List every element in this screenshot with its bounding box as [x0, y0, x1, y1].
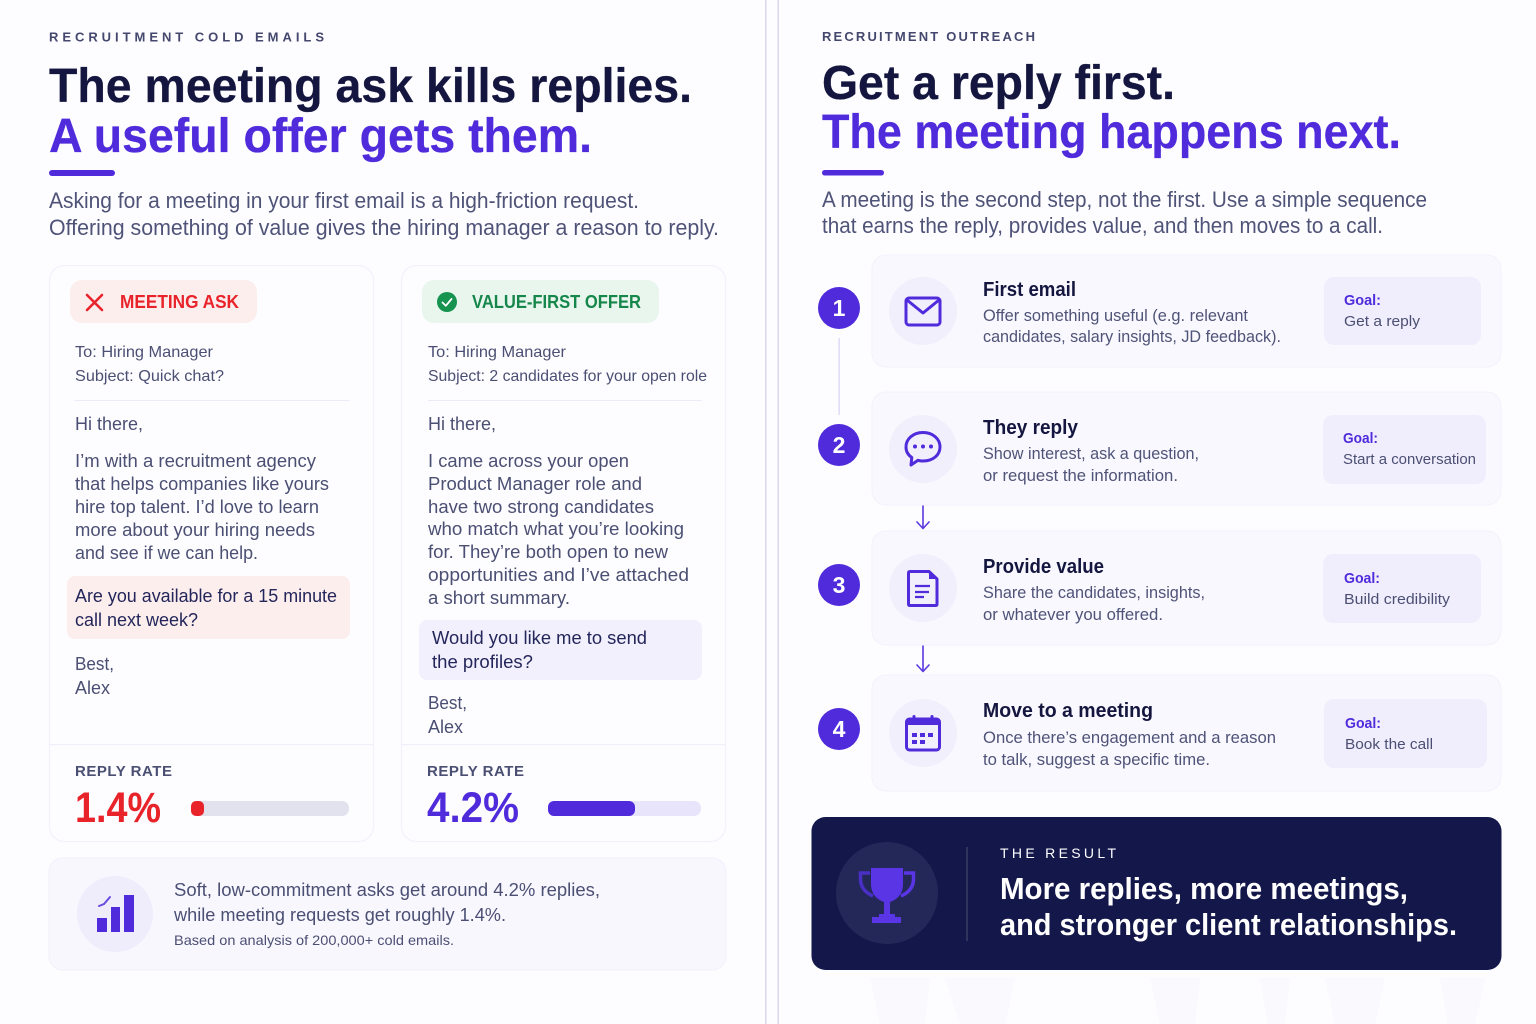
goal: book the call: Goal: — [1345, 715, 1381, 732]
text block: right intro: A meeting is the second step, not the first. Use a simple sequence — [822, 187, 1427, 212]
arrow: step 2 to step 3 — [917, 506, 929, 528]
text block: email header — [75, 344, 224, 385]
badge: value-first offer: VALUE-FIRST OFFER — [472, 292, 641, 312]
text block: sign-off: Best, — [75, 653, 114, 674]
chart: reply rate 1.4% — [75, 763, 349, 832]
number badge 1 — [818, 287, 860, 329]
text block: right intro: that earns the reply, provides value, and then moves to a call. — [822, 213, 1383, 238]
text block: email body: a short summary. — [428, 587, 570, 608]
title: right headline: The meeting happens next. — [822, 106, 1401, 159]
text block: email header — [428, 344, 707, 385]
step 4: move to a meeting — [818, 675, 1501, 791]
title: right headline: Get a reply first. — [822, 57, 1175, 110]
chart: reply rate 1.4%: REPLY RATE — [75, 763, 172, 780]
text: provide value copy: Share the candidates, insights, — [983, 584, 1205, 602]
text block: email header: Subject: 2 candidates for your open role — [428, 368, 707, 385]
text block: email body: I’m with a recruitment agency — [75, 450, 317, 471]
text block: email body: for. They’re both open to new — [428, 541, 669, 562]
text: first email copy: candidates, salary insights, JD feedback). — [983, 328, 1281, 346]
icon: document — [889, 554, 957, 622]
text block: sign-off — [75, 653, 114, 698]
title: left headline: A useful offer gets them. — [49, 110, 592, 163]
goal: build credibility — [1323, 554, 1481, 623]
icon: green check — [437, 292, 457, 312]
eyebrow: recruitment cold emails: RECRUITMENT COLD EMAILS — [49, 30, 324, 44]
chart: reply rate 4.2%: 4.2% — [427, 784, 519, 832]
icon: calendar — [889, 699, 957, 767]
text block: email body: Hi there, — [75, 413, 143, 434]
text: they reply copy: Show interest, ask a question, — [983, 445, 1199, 463]
icon: trophy — [836, 842, 938, 944]
step 3: provide value — [818, 531, 1501, 645]
callout: soft ask highlight: the profiles? — [432, 651, 533, 672]
panel: right column recruitment outreach — [812, 29, 1502, 970]
step 2: they reply — [818, 392, 1501, 505]
text: move to a meeting copy: to talk, suggest a specific time. — [983, 751, 1210, 769]
text: move to a meeting copy: Move to a meeting — [983, 700, 1153, 722]
goal: start a conversation: Goal: — [1343, 430, 1378, 447]
text block: sign-off: Alex — [75, 677, 111, 698]
number badge 2: 2 — [833, 432, 845, 458]
goal: build credibility: Build credibility — [1344, 591, 1451, 608]
text block: email body: I came across your open — [428, 450, 629, 471]
text: they reply copy: or request the information. — [983, 467, 1178, 485]
text block: email body — [427, 413, 689, 608]
badge: meeting ask: MEETING ASK — [120, 292, 239, 312]
text block: sign-off — [428, 692, 467, 737]
callout: meeting request highlight: call next week? — [75, 609, 198, 630]
text: the result copy: and stronger client relationships. — [1000, 907, 1457, 942]
icon: speech bubble — [889, 415, 957, 483]
panel: statistic note — [49, 858, 726, 970]
text: first email copy — [983, 279, 1281, 346]
text block: email body: Hi there, — [428, 413, 496, 434]
goal: book the call: Book the call — [1345, 736, 1433, 753]
callout: meeting request highlight — [67, 576, 350, 639]
chart: reply rate 4.2%: REPLY RATE — [427, 763, 524, 780]
title: right headline — [822, 57, 1401, 159]
number badge 1: 1 — [833, 295, 846, 321]
panel: left column recruitment cold emails — [49, 30, 726, 970]
text block: email body: hire top talent. I’d love to learn — [75, 496, 319, 517]
text block: email header: Subject: Quick chat? — [75, 368, 224, 385]
text block: statistic explanation — [173, 879, 600, 948]
goal: get a reply: Get a reply — [1344, 313, 1421, 330]
goal: start a conversation — [1323, 415, 1486, 484]
text block: email header: To: Hiring Manager — [428, 344, 567, 361]
goal: get a reply: Goal: — [1344, 292, 1381, 309]
text block: email body: that helps companies like yours — [75, 473, 329, 494]
text block: left intro: Offering something of value gives the hiring manager a reason to reply. — [49, 215, 719, 240]
panel: value-first offer email — [402, 266, 726, 842]
text: provide value copy: Provide value — [983, 556, 1104, 578]
icon: red cross — [87, 295, 102, 310]
text: the result copy — [1000, 845, 1457, 942]
chart: reply rate 1.4%: 1.4% — [75, 784, 161, 832]
number badge 3 — [818, 564, 860, 606]
step 1: first email — [818, 255, 1501, 367]
panel: the result — [812, 817, 1502, 970]
number badge 2 — [818, 424, 860, 466]
goal: get a reply — [1324, 277, 1481, 345]
text block: email body: and see if we can help. — [75, 542, 258, 563]
text: move to a meeting copy: Once there’s engagement and a reason — [983, 729, 1276, 747]
text block: email body — [75, 413, 329, 563]
text: they reply copy — [983, 417, 1199, 485]
goal: build credibility: Goal: — [1344, 570, 1380, 587]
text: the result copy: THE RESULT — [1000, 845, 1116, 861]
number badge 4 — [818, 708, 860, 750]
text block: right intro — [822, 187, 1427, 238]
text: provide value copy: or whatever you offered. — [983, 606, 1163, 624]
text block: statistic explanation: while meeting requests get roughly 1.4%. — [173, 904, 506, 925]
text block: email body: Product Manager role and — [428, 473, 642, 494]
eyebrow: recruitment outreach: RECRUITMENT OUTREACH — [822, 29, 1035, 44]
text block: statistic explanation: Based on analysis of 200,000+ cold emails. — [174, 932, 454, 948]
text block: statistic explanation: Soft, low-commitment asks get around 4.2% replies, — [174, 879, 600, 900]
arrow: step 3 to step 4 — [917, 646, 929, 672]
number badge 4: 4 — [833, 716, 846, 742]
badge: meeting ask — [70, 280, 257, 323]
callout: soft ask highlight — [419, 620, 702, 680]
text: provide value copy — [983, 556, 1205, 624]
text block: email body: more about your hiring needs — [75, 519, 315, 540]
text block: left intro: Asking for a meeting in your first email is a high-friction request. — [49, 188, 639, 213]
text block: sign-off: Best, — [428, 692, 467, 713]
text block: left intro — [49, 188, 719, 240]
text: first email copy: First email — [983, 279, 1076, 301]
text: the result copy: More replies, more meetings, — [1000, 871, 1408, 906]
text: move to a meeting copy — [983, 700, 1276, 769]
callout: soft ask highlight: Would you like me to send — [432, 627, 647, 648]
text: first email copy: Offer something useful (e.g. relevant — [983, 307, 1248, 325]
text block: email body: have two strong candidates — [428, 496, 654, 517]
icon: bar chart — [77, 876, 153, 952]
icon: envelope — [889, 277, 957, 345]
text block: email header: To: Hiring Manager — [75, 344, 214, 361]
text block: email body: opportunities and I’ve attached — [428, 564, 689, 585]
panel: meeting ask email — [50, 266, 374, 842]
chart: reply rate 4.2% — [427, 763, 701, 832]
text: they reply copy: They reply — [983, 417, 1079, 439]
title: left headline — [49, 60, 692, 163]
number badge 3: 3 — [833, 572, 845, 598]
text block: sign-off: Alex — [428, 716, 464, 737]
badge: value-first offer — [422, 280, 659, 323]
goal: book the call — [1324, 699, 1487, 768]
callout: meeting request highlight: Are you available for a 15 minute — [75, 585, 337, 606]
goal: start a conversation: Start a conversation — [1343, 451, 1476, 468]
title: left headline: The meeting ask kills replies. — [49, 60, 692, 113]
text block: email body: who match what you’re looking — [427, 518, 684, 539]
